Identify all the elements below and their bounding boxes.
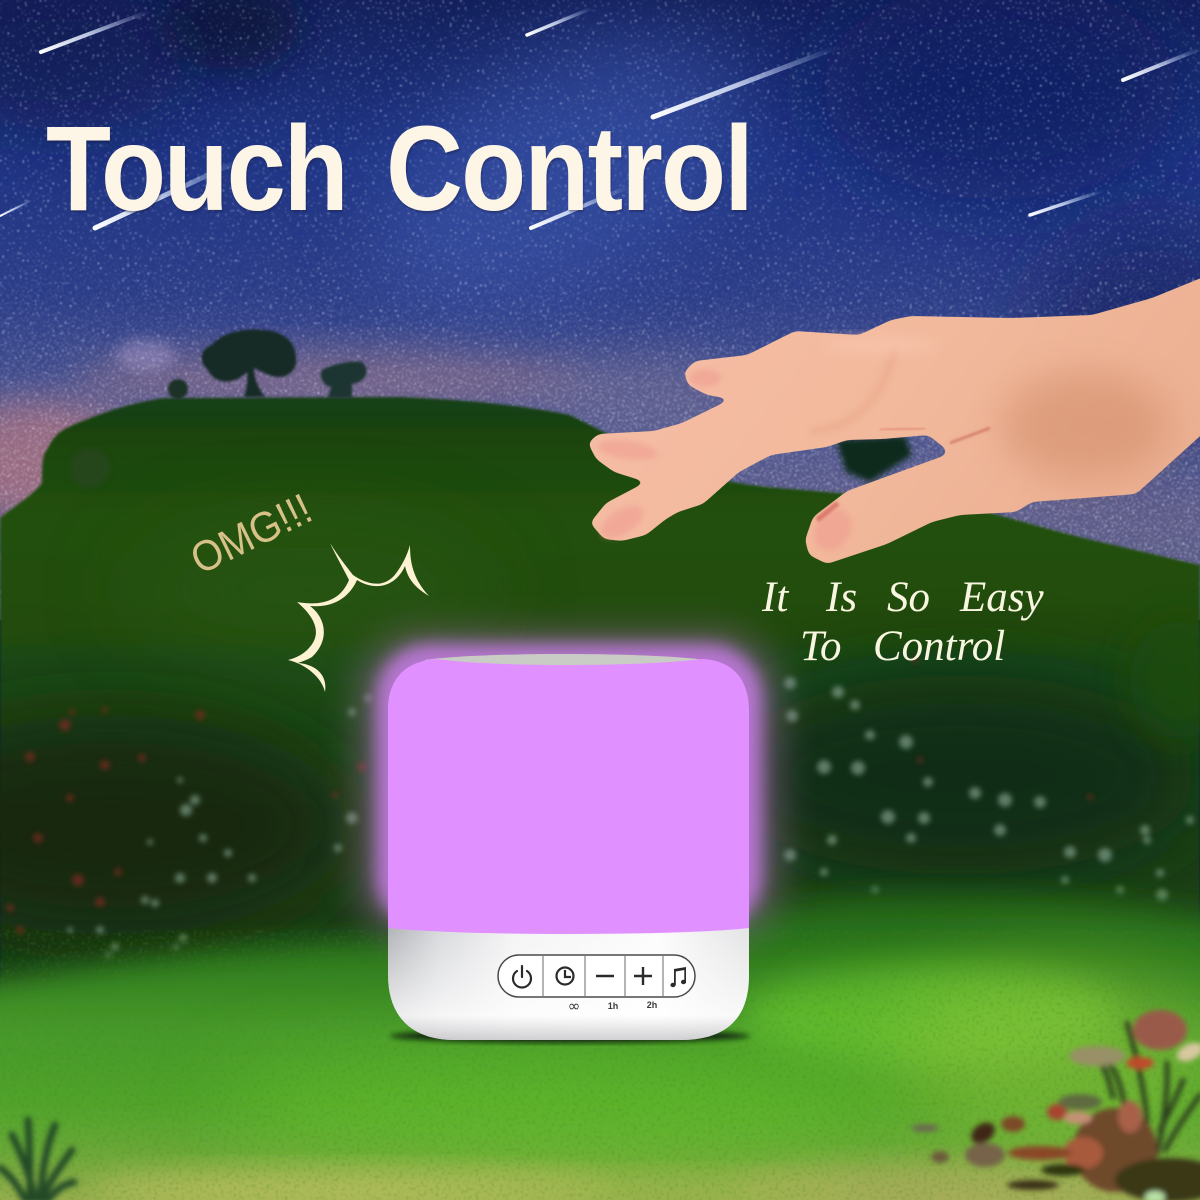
icon: clock bbox=[556, 968, 574, 984]
caption: It Is So Easy To Control: It bbox=[761, 574, 789, 621]
timer labels: ∞ bbox=[568, 997, 580, 1015]
foreground grass bbox=[0, 892, 1200, 1200]
icon: burst lines bbox=[288, 543, 429, 692]
hand bbox=[588, 262, 1200, 564]
nail shading bbox=[595, 369, 860, 558]
timer labels bbox=[568, 997, 657, 1015]
plant: bottom left bbox=[0, 1120, 74, 1200]
white base bbox=[388, 900, 749, 1040]
speaker grille bbox=[425, 654, 705, 670]
far bush behind hand bbox=[836, 436, 912, 482]
hill with trees bbox=[0, 330, 1200, 1010]
lamp glow bbox=[358, 632, 780, 1043]
title: Touch bbox=[46, 102, 349, 237]
icon: plus bbox=[634, 967, 652, 985]
tree bbox=[202, 330, 296, 397]
title: Control bbox=[386, 102, 754, 237]
plants: bottom right bbox=[911, 1010, 1200, 1200]
exclamation: OMG: OMG!!! bbox=[183, 485, 319, 584]
icon: music note bbox=[670, 967, 686, 987]
caption: It Is So Easy To Control: To bbox=[800, 623, 841, 670]
icon: power bbox=[513, 966, 531, 987]
title bbox=[46, 102, 754, 237]
caption: It Is So Easy To Control: Control bbox=[873, 623, 1005, 670]
dark meadow with flowers bbox=[0, 520, 1200, 958]
control button strip bbox=[498, 955, 695, 997]
caption: It Is So Easy To Control: Is bbox=[825, 574, 857, 621]
icon: minus bbox=[596, 975, 614, 977]
caption: It Is So Easy To Control: Easy bbox=[959, 574, 1044, 621]
purple shade bbox=[388, 659, 749, 934]
pale flowers bbox=[67, 677, 1194, 958]
shooting stars bbox=[0, 8, 1200, 228]
product: night-light speaker bbox=[388, 654, 749, 1040]
timer labels: 2h bbox=[647, 1000, 657, 1010]
right bush bbox=[321, 361, 367, 398]
background: night sky bbox=[0, 0, 1200, 620]
timer labels: 1h bbox=[608, 1001, 618, 1011]
caption: It Is So Easy To Control: So bbox=[887, 574, 930, 621]
small bush bbox=[168, 379, 188, 399]
red flowers bbox=[6, 657, 1093, 934]
